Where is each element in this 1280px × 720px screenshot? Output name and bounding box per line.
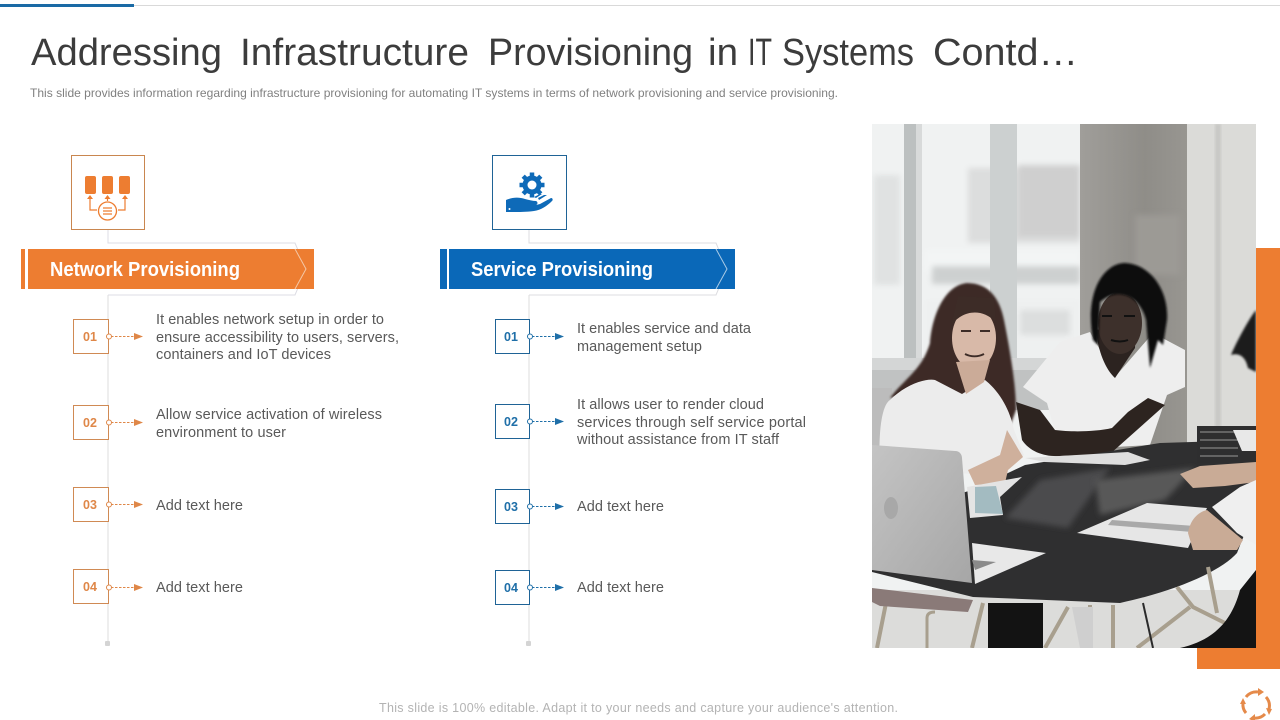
connector outline: service — [529, 230, 727, 295]
panel: service provisioning — [440, 156, 806, 646]
title: Contd… — [933, 32, 1078, 74]
item 04 — [496, 570, 664, 604]
icon: gear on hand — [492, 156, 566, 230]
item 02: 02 — [83, 416, 97, 430]
item 02: without assistance from IT staff — [576, 432, 780, 448]
title: Addressing — [31, 32, 222, 74]
item 01 — [74, 312, 399, 363]
item 02 — [496, 397, 806, 448]
item 02: services through self service portal — [577, 415, 806, 431]
item 01: containers and IoT devices — [156, 347, 331, 363]
papers and books — [1077, 503, 1207, 548]
title: Provisioning — [488, 32, 693, 74]
item 04: 04 — [504, 581, 518, 595]
item 04: Add text here — [156, 580, 243, 596]
item 01: 01 — [504, 330, 518, 344]
item 03: Add text here — [156, 498, 243, 514]
banner: network provisioning — [21, 249, 314, 289]
title: Infrastructure — [240, 32, 469, 74]
banner: service provisioning — [440, 249, 735, 289]
item 02: 02 — [504, 415, 518, 429]
item 01: 01 — [83, 330, 97, 344]
right hand person — [1180, 462, 1256, 550]
item 01: ensure accessibility to users, servers, — [156, 330, 399, 346]
woman — [880, 281, 1018, 446]
item 01: It enables service and data — [577, 321, 752, 337]
item 01: It enables network setup in order to — [156, 312, 384, 328]
panel: network provisioning — [21, 156, 399, 646]
item 04: Add text here — [577, 580, 664, 596]
item 02: environment to user — [156, 425, 286, 441]
item 04 — [74, 570, 243, 604]
photo: team meeting around table — [872, 124, 1256, 648]
icon: network servers — [72, 156, 144, 230]
title: IT — [748, 32, 772, 74]
laptop — [972, 543, 1046, 584]
man — [1016, 263, 1185, 456]
item 04: 04 — [83, 580, 97, 594]
title — [31, 32, 1078, 74]
woman's hand — [968, 430, 1023, 485]
timeline line: network — [105, 295, 110, 646]
item 01 — [496, 320, 752, 355]
banner: network provisioning: Network Provisioning — [50, 259, 240, 281]
orange backing block — [1197, 248, 1280, 669]
item 03: 03 — [83, 498, 97, 512]
icon: refresh cycle — [1240, 688, 1272, 720]
subtitle: This slide provides information regarding infrastructure provisioning for automating IT systems in terms of network provisioning and service provisioning. — [30, 86, 838, 100]
banner: service provisioning: Service Provisioning — [471, 259, 653, 281]
item 03 — [74, 488, 243, 522]
item 03: Add text here — [577, 499, 664, 515]
table legs and floor — [877, 567, 1233, 648]
top accent rule — [0, 4, 1280, 7]
table — [872, 440, 1256, 603]
item 02 — [74, 406, 382, 441]
timeline line: service — [526, 295, 531, 646]
footer note: This slide is 100% editable. Adapt it to your needs and capture your audience's attention. — [379, 701, 898, 715]
title: Systems — [782, 32, 914, 74]
item 01: management setup — [577, 339, 702, 355]
item 02: Allow service activation of wireless — [156, 407, 382, 423]
title: in — [708, 32, 738, 74]
connector outline: network — [108, 230, 306, 295]
item 03: 03 — [504, 500, 518, 514]
item 03 — [496, 490, 664, 524]
item 02: It allows user to render cloud — [577, 397, 764, 413]
